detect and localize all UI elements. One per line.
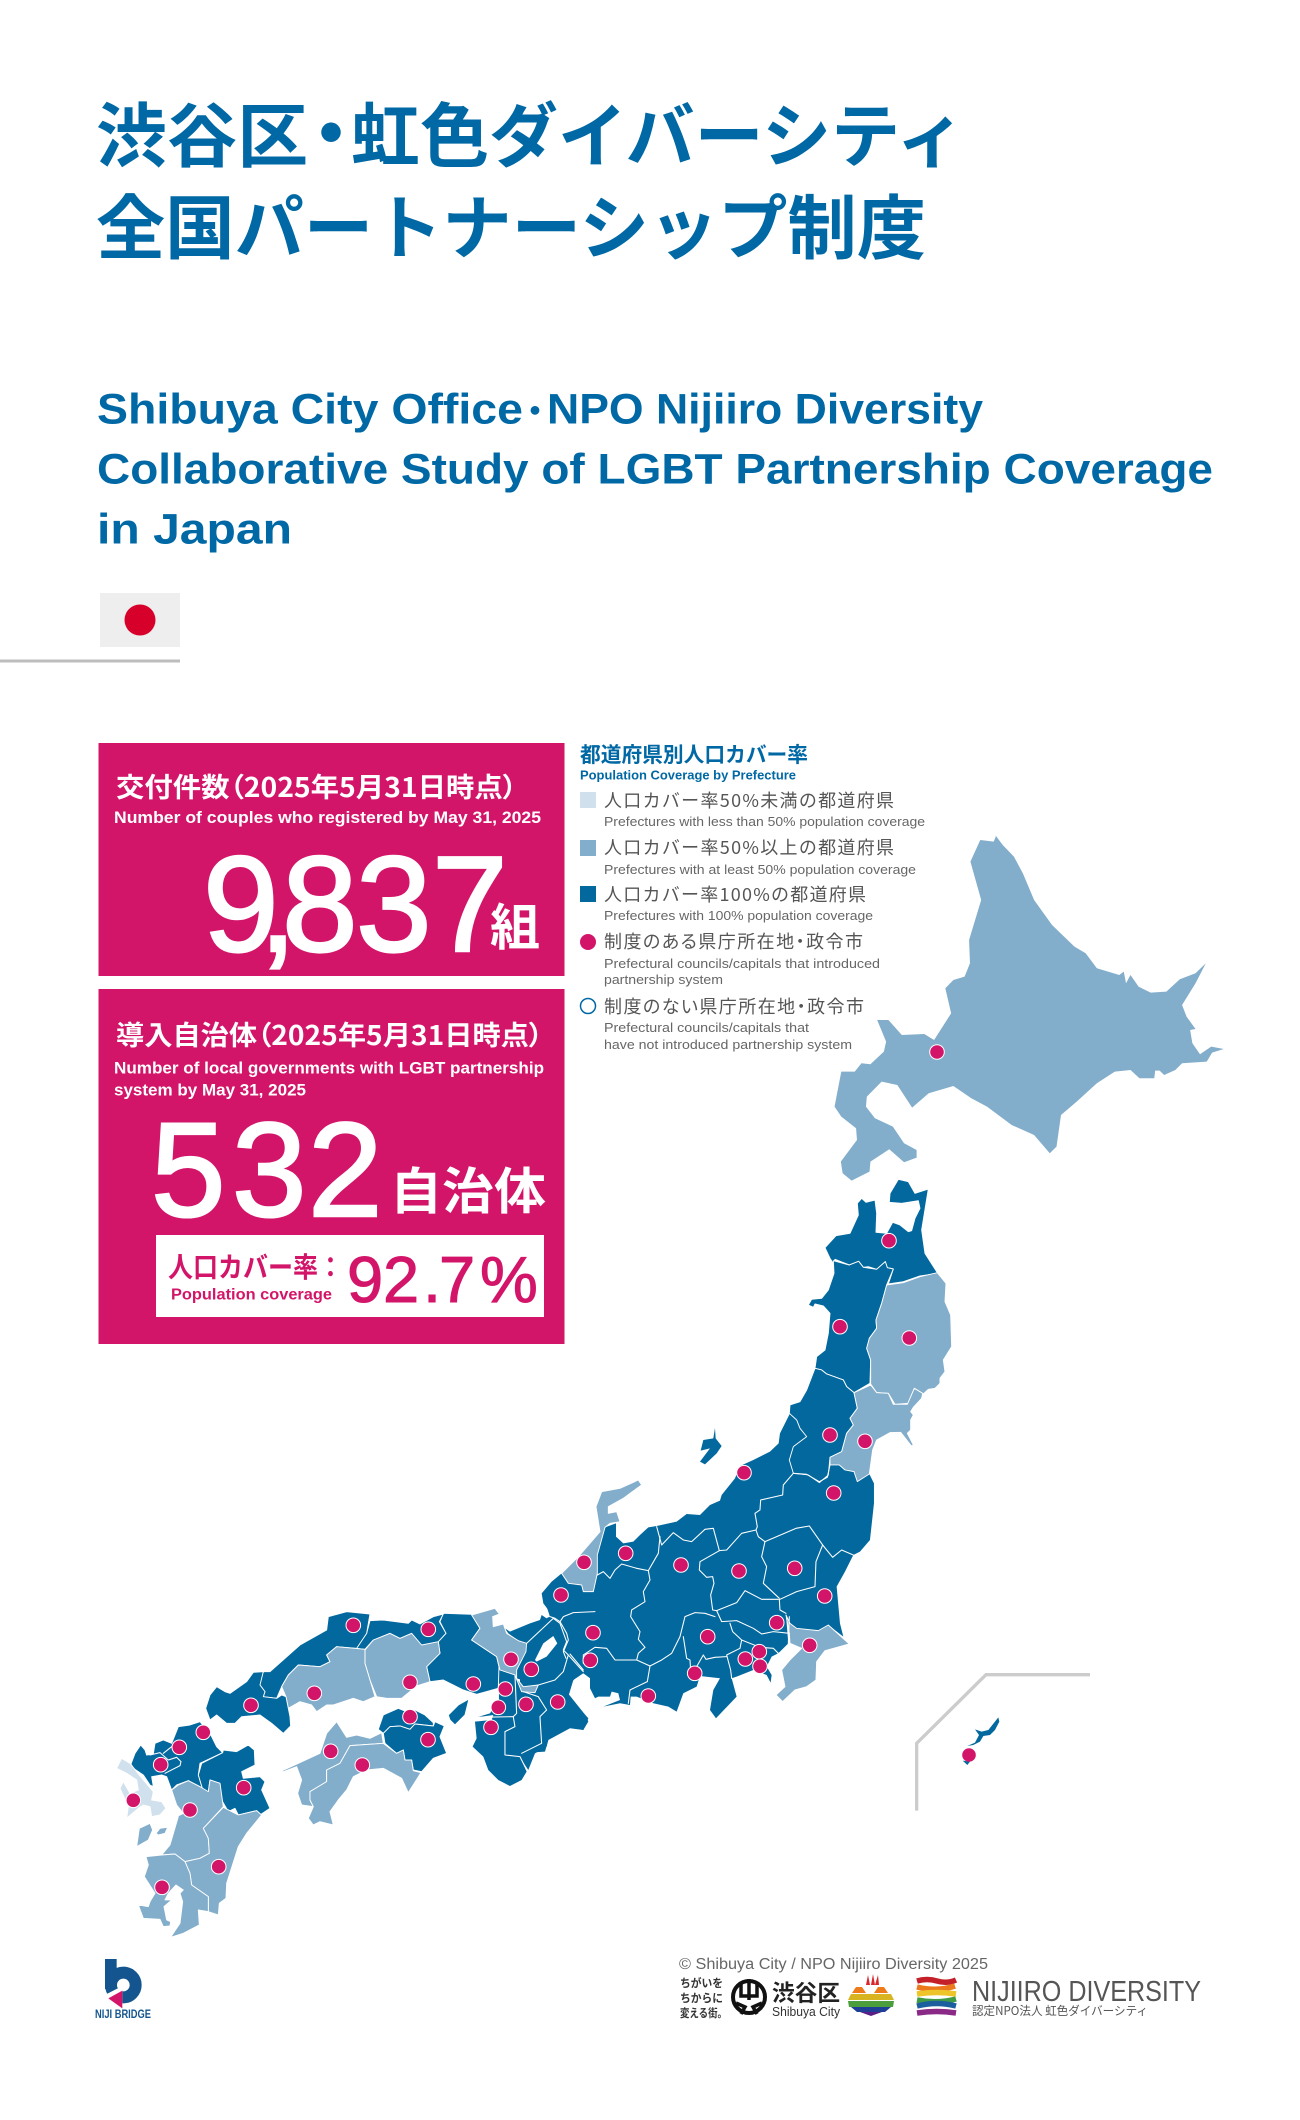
footer: Nijiiro Diversity wordmark (972, 1976, 1201, 2019)
logo: Niji Bridge (95, 1959, 151, 2021)
coverage label: 人口カバー率： (168, 1246, 343, 1286)
icon: Nijiiro Diversity logo (917, 1980, 956, 2013)
footer: Shibuya slogan (680, 1976, 727, 2020)
panel subheading: local governments: Number of local governments with LGBT partnership (114, 1060, 544, 1078)
icon: rainbow iris emblem (848, 1974, 894, 2016)
footer: Shibuya slogan: 変える街。 (680, 2006, 727, 2020)
footer: Shibuya City wordmark: 渋谷区 (772, 1976, 840, 2008)
legend item: without system (580, 993, 864, 1052)
legend item: 100 percent: Prefectures with 100% population coverage (604, 909, 873, 923)
legend item: under 50 percent: Prefectures with less than 50% population coverage (604, 815, 925, 829)
legend item: at least 50 percent: 人口カバー率50%以上の都道府県 (604, 834, 894, 860)
title: Japanese heading (96, 93, 965, 268)
legend title: 都道府県別人口カバー率 (580, 739, 808, 769)
title: Japanese heading: ・ (293, 93, 369, 178)
footer: Shibuya slogan: ちからに (680, 1992, 723, 2005)
callout: population coverage (156, 1235, 544, 1317)
panel subheading: local governments (114, 1060, 544, 1100)
footer: Shibuya slogan: ちがいを (680, 1976, 723, 1990)
map: Sado island (700, 1428, 722, 1464)
coverage english label: Population coverage (171, 1286, 332, 1304)
legend item: with system: 制度のある県庁所在地・政令市 (604, 928, 863, 954)
footer: Nijiiro Diversity wordmark: 認定NPO法人 虹色ダイバーシティ (972, 2002, 1148, 2019)
title: Japanese heading: 全国パートナーシップ制度 (96, 190, 926, 268)
coverage value: 92.7% (347, 1243, 538, 1316)
subtitle: English heading: Shibuya City Office (97, 386, 523, 434)
subtitle: English heading: ・ (518, 384, 552, 434)
map: Chubu and Kanto light prefectures and borders (550, 1465, 853, 1703)
subtitle: English heading (97, 384, 1213, 554)
legend item: 100 percent: 人口カバー率100%の都道府県 (604, 881, 866, 907)
legend item: with system (580, 928, 880, 987)
panel subheading: local governments: system by May 31, 2025 (114, 1082, 306, 1100)
map: Okinawa inset frame (917, 1675, 1090, 1811)
legend item: without system: have not introduced partnership system (604, 1038, 852, 1052)
icon: Shibuya city emblem (733, 1979, 765, 2014)
map: Kansai base (473, 1593, 600, 1786)
map: western Honshu, Shikoku and Kyushu (117, 1608, 583, 1937)
map of Japan (117, 836, 1224, 1937)
map: Tohoku (789, 1179, 952, 1483)
footer: Shibuya City wordmark: Shibuya City (772, 2004, 840, 2019)
panel heading: local governments: 導入自治体（2025年5月31日時点） (116, 1014, 543, 1053)
legend item: at least 50 percent: Prefectures with at least 50% population coverage (604, 863, 916, 877)
icon: Japanese flag (100, 593, 180, 647)
big number: 532: 532 (151, 1096, 383, 1245)
logo: Niji Bridge: NIJI BRIDGE (95, 2009, 151, 2021)
map: Okinawa islands (963, 1717, 999, 1765)
legend (580, 739, 925, 1052)
legend item: with system: Prefectural councils/capitals that introduced (604, 957, 880, 971)
legend item: under 50 percent (580, 787, 925, 829)
subtitle: English heading: in Japan (97, 506, 292, 554)
footer: copyright: © Shibuya City / NPO Nijiiro Diversity 2025 (679, 1956, 988, 1973)
legend item: at least 50 percent (580, 834, 916, 877)
big number: 9,837: 9,837 (203, 828, 508, 980)
map: Hokkaido (835, 836, 1224, 1181)
panel heading: couples: 交付件数（2025年5月31日時点） (116, 766, 517, 805)
map markers: councils with partnership system (126, 1045, 976, 1895)
footer: Nijiiro Diversity wordmark: NIJIIRO DIVERSITY (972, 1976, 1201, 2008)
map: Lake Biwa (535, 1636, 557, 1662)
legend subtitle: Population Coverage by Prefecture (580, 768, 796, 782)
unit: municipalities: 自治体 (390, 1152, 546, 1224)
panel: number of couples registered (98, 743, 564, 980)
unit: couples: 組 (490, 888, 540, 960)
map: Chubu and Kanto base (520, 1413, 874, 1753)
subtitle: English heading: NPO Nijiiro Diversity (547, 386, 983, 434)
subtitle: English heading: Collaborative Study of LGBT Partnership Coverage (97, 446, 1213, 494)
legend item: without system: Prefectural councils/capitals that (604, 1021, 810, 1035)
panel subheading: couples: Number of couples who registered by May 31, 2025 (114, 809, 541, 827)
legend item: without system: 制度のない県庁所在地・政令市 (604, 993, 864, 1019)
legend item: under 50 percent: 人口カバー率50%未満の都道府県 (604, 787, 894, 813)
legend item: with system: partnership system (604, 973, 723, 987)
title: Japanese heading: 渋谷区 (96, 98, 308, 176)
title: Japanese heading: 虹色ダイバーシティ (351, 98, 965, 176)
panel: local governments with partnership system (98, 989, 564, 1344)
legend item: 100 percent (580, 881, 873, 923)
